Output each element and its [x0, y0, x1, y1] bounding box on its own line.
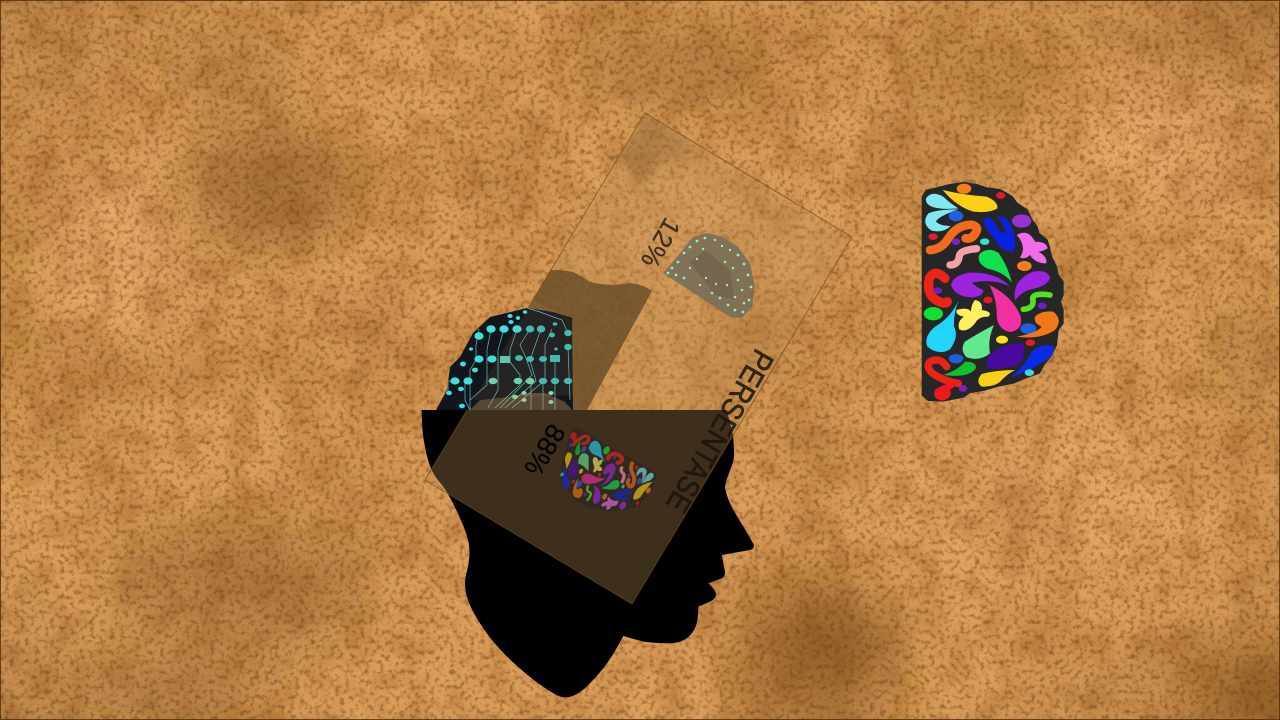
label: 88%: 88% — [518, 419, 571, 481]
circuit brain above the head — [436, 300, 573, 410]
circuit traces — [448, 308, 570, 410]
shadow shape on the paper — [528, 270, 652, 410]
paper overlap on the circuit brain — [470, 393, 572, 410]
translucent paper sheet — [425, 113, 852, 604]
colourful brain, small inside the head — [544, 427, 660, 530]
small brain traces and nodes — [667, 237, 752, 313]
small circuit brain on the paper — [663, 233, 755, 318]
label: 12%: 12% — [635, 213, 687, 273]
darker corner of the paper — [620, 116, 687, 184]
circuit nodes — [446, 310, 572, 408]
head silhouette — [422, 410, 754, 697]
label: PERSENTASE: PERSENTASE — [659, 344, 781, 519]
colourful brain, large — [923, 183, 1063, 401]
